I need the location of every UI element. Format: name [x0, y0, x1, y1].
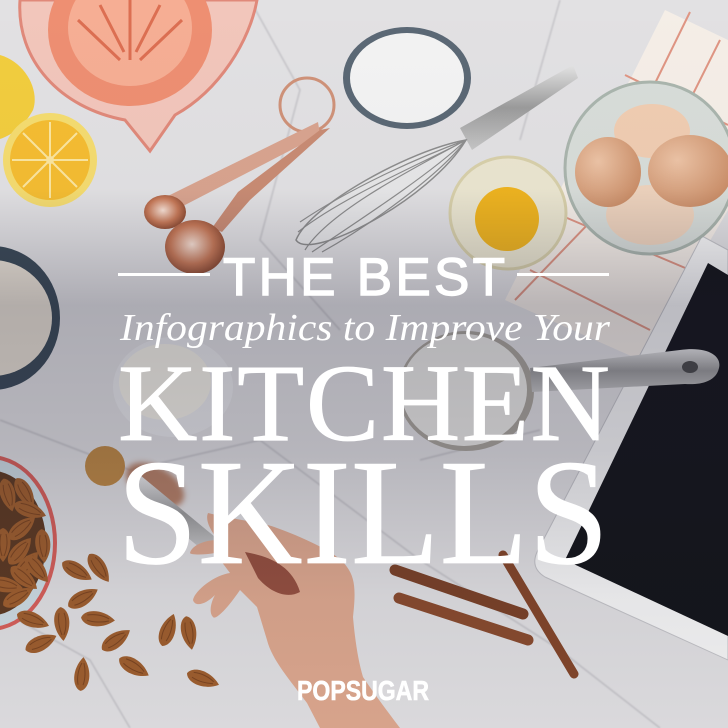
hand holding spoon	[132, 480, 400, 728]
egg bowl	[565, 82, 728, 254]
subheading: Infographics to Improve Your	[119, 307, 610, 349]
lemon half	[3, 113, 97, 207]
nutmeg and cinnamon dust	[85, 446, 192, 517]
heading: kitchen: KITCHEN	[118, 342, 610, 464]
scattered almonds	[14, 550, 222, 692]
logo: popsugar: POPSUGAR	[297, 675, 429, 706]
flour bowl	[343, 27, 471, 129]
measuring cup with flour	[398, 331, 719, 451]
title block	[117, 248, 610, 596]
lemon wedge	[0, 55, 35, 139]
measuring spoons	[144, 78, 334, 274]
towel	[505, 10, 728, 360]
whisk	[296, 65, 578, 252]
tablet	[535, 236, 728, 660]
sugar bowl	[0, 246, 60, 390]
heading: skills: SKILLS	[117, 428, 609, 596]
heading: the best	[118, 248, 609, 307]
juicer	[20, 0, 257, 151]
heading: the best: THE BEST	[223, 248, 505, 307]
small white cup	[113, 337, 233, 437]
egg yolk bowl	[450, 157, 566, 269]
almond bowl	[0, 455, 57, 631]
cinnamon sticks	[395, 555, 574, 674]
